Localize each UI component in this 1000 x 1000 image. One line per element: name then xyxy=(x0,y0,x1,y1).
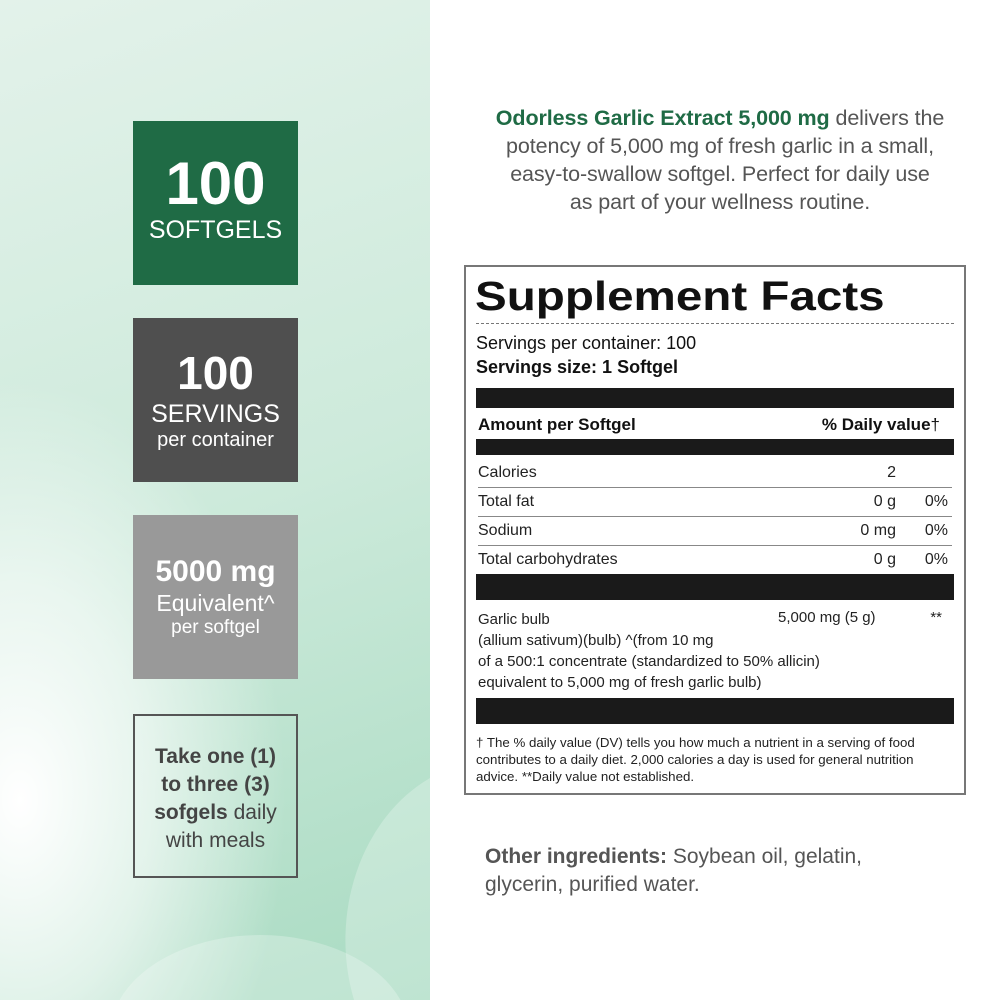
supplement facts panel xyxy=(464,265,966,795)
other ingredients: glycerin, purified water. xyxy=(485,873,700,896)
box: 100 servings xyxy=(133,318,298,482)
nutrient rows xyxy=(478,459,952,488)
heading: Supplement Facts xyxy=(475,273,885,319)
garlic ingredient xyxy=(478,609,942,691)
intro text: Odorless Garlic Extract 5,000 mg delivers the xyxy=(496,106,944,130)
column header: Amount per Softgel xyxy=(478,415,636,434)
box: 100 softgels: SOFTGELS xyxy=(149,216,282,244)
box: directions: sofgels daily xyxy=(154,801,277,824)
box: 100 softgels xyxy=(133,121,298,285)
box: directions: Take one (1) xyxy=(155,745,276,768)
servings info xyxy=(476,333,696,377)
supplement facts panel: 0 mg xyxy=(860,522,896,539)
garlic ingredient: Garlic bulb xyxy=(478,611,550,628)
other ingredients xyxy=(485,845,862,896)
supplement facts panel: Total fat xyxy=(478,493,534,510)
left background panel xyxy=(0,0,430,1000)
intro text: as part of your wellness routine. xyxy=(570,190,870,214)
box: 5000 mg equivalent: 5000 mg xyxy=(155,555,276,588)
garlic ingredient: (allium sativum)(bulb) ^(from 10 mg xyxy=(478,632,713,649)
column header xyxy=(478,415,940,434)
footnote: contributes to a daily diet. 2,000 calories a day is used for general nutrition xyxy=(476,752,914,767)
supplement facts panel: 0% xyxy=(925,522,948,539)
box: 100 servings: 100 xyxy=(177,347,254,399)
supplement facts panel: 0 g xyxy=(874,551,896,568)
nutrient rows: Calories xyxy=(478,464,537,481)
servings info: Servings per container: 100 xyxy=(476,333,696,353)
other ingredients: Other ingredients: Soybean oil, gelatin, xyxy=(485,845,862,868)
box: 5000 mg equivalent: Equivalent^ xyxy=(156,590,275,616)
garlic ingredient: 5,000 mg (5 g) xyxy=(778,609,876,626)
supplement facts panel: 0% xyxy=(925,551,948,568)
garlic ingredient: equivalent to 5,000 mg of fresh garlic bulb) xyxy=(478,674,762,691)
column header: % Daily value† xyxy=(822,415,940,434)
box: directions: to three (3) xyxy=(161,773,270,796)
servings info: Servings size: 1 Softgel xyxy=(476,357,678,377)
nutrient rows: 2 xyxy=(887,464,896,481)
box: 100 softgels: 100 xyxy=(165,150,266,217)
supplement facts panel: Sodium xyxy=(478,522,532,539)
intro text xyxy=(496,106,944,214)
box: directions xyxy=(133,714,298,878)
supplement facts panel: 0 g xyxy=(874,493,896,510)
box: 5000 mg equivalent: per softgel xyxy=(171,617,260,638)
box: directions: with meals xyxy=(166,829,265,852)
intro text: easy-to-swallow softgel. Perfect for daily use xyxy=(510,162,930,186)
box: 100 servings: per container xyxy=(157,429,274,451)
box: 5000 mg equivalent xyxy=(133,515,298,679)
footnote xyxy=(476,735,915,784)
box: 100 servings: SERVINGS xyxy=(151,400,280,428)
supplement facts panel: Total carbohydrates xyxy=(478,551,618,568)
intro text: potency of 5,000 mg of fresh garlic in a small, xyxy=(506,134,934,158)
garlic ingredient: of a 500:1 concentrate (standardized to 50% allicin) xyxy=(478,653,820,670)
supplement facts panel: 0% xyxy=(925,493,948,510)
footnote: advice. **Daily value not established. xyxy=(476,769,694,784)
footnote: † The % daily value (DV) tells you how much a nutrient in a serving of food xyxy=(476,735,915,750)
garlic ingredient: ** xyxy=(930,609,942,626)
